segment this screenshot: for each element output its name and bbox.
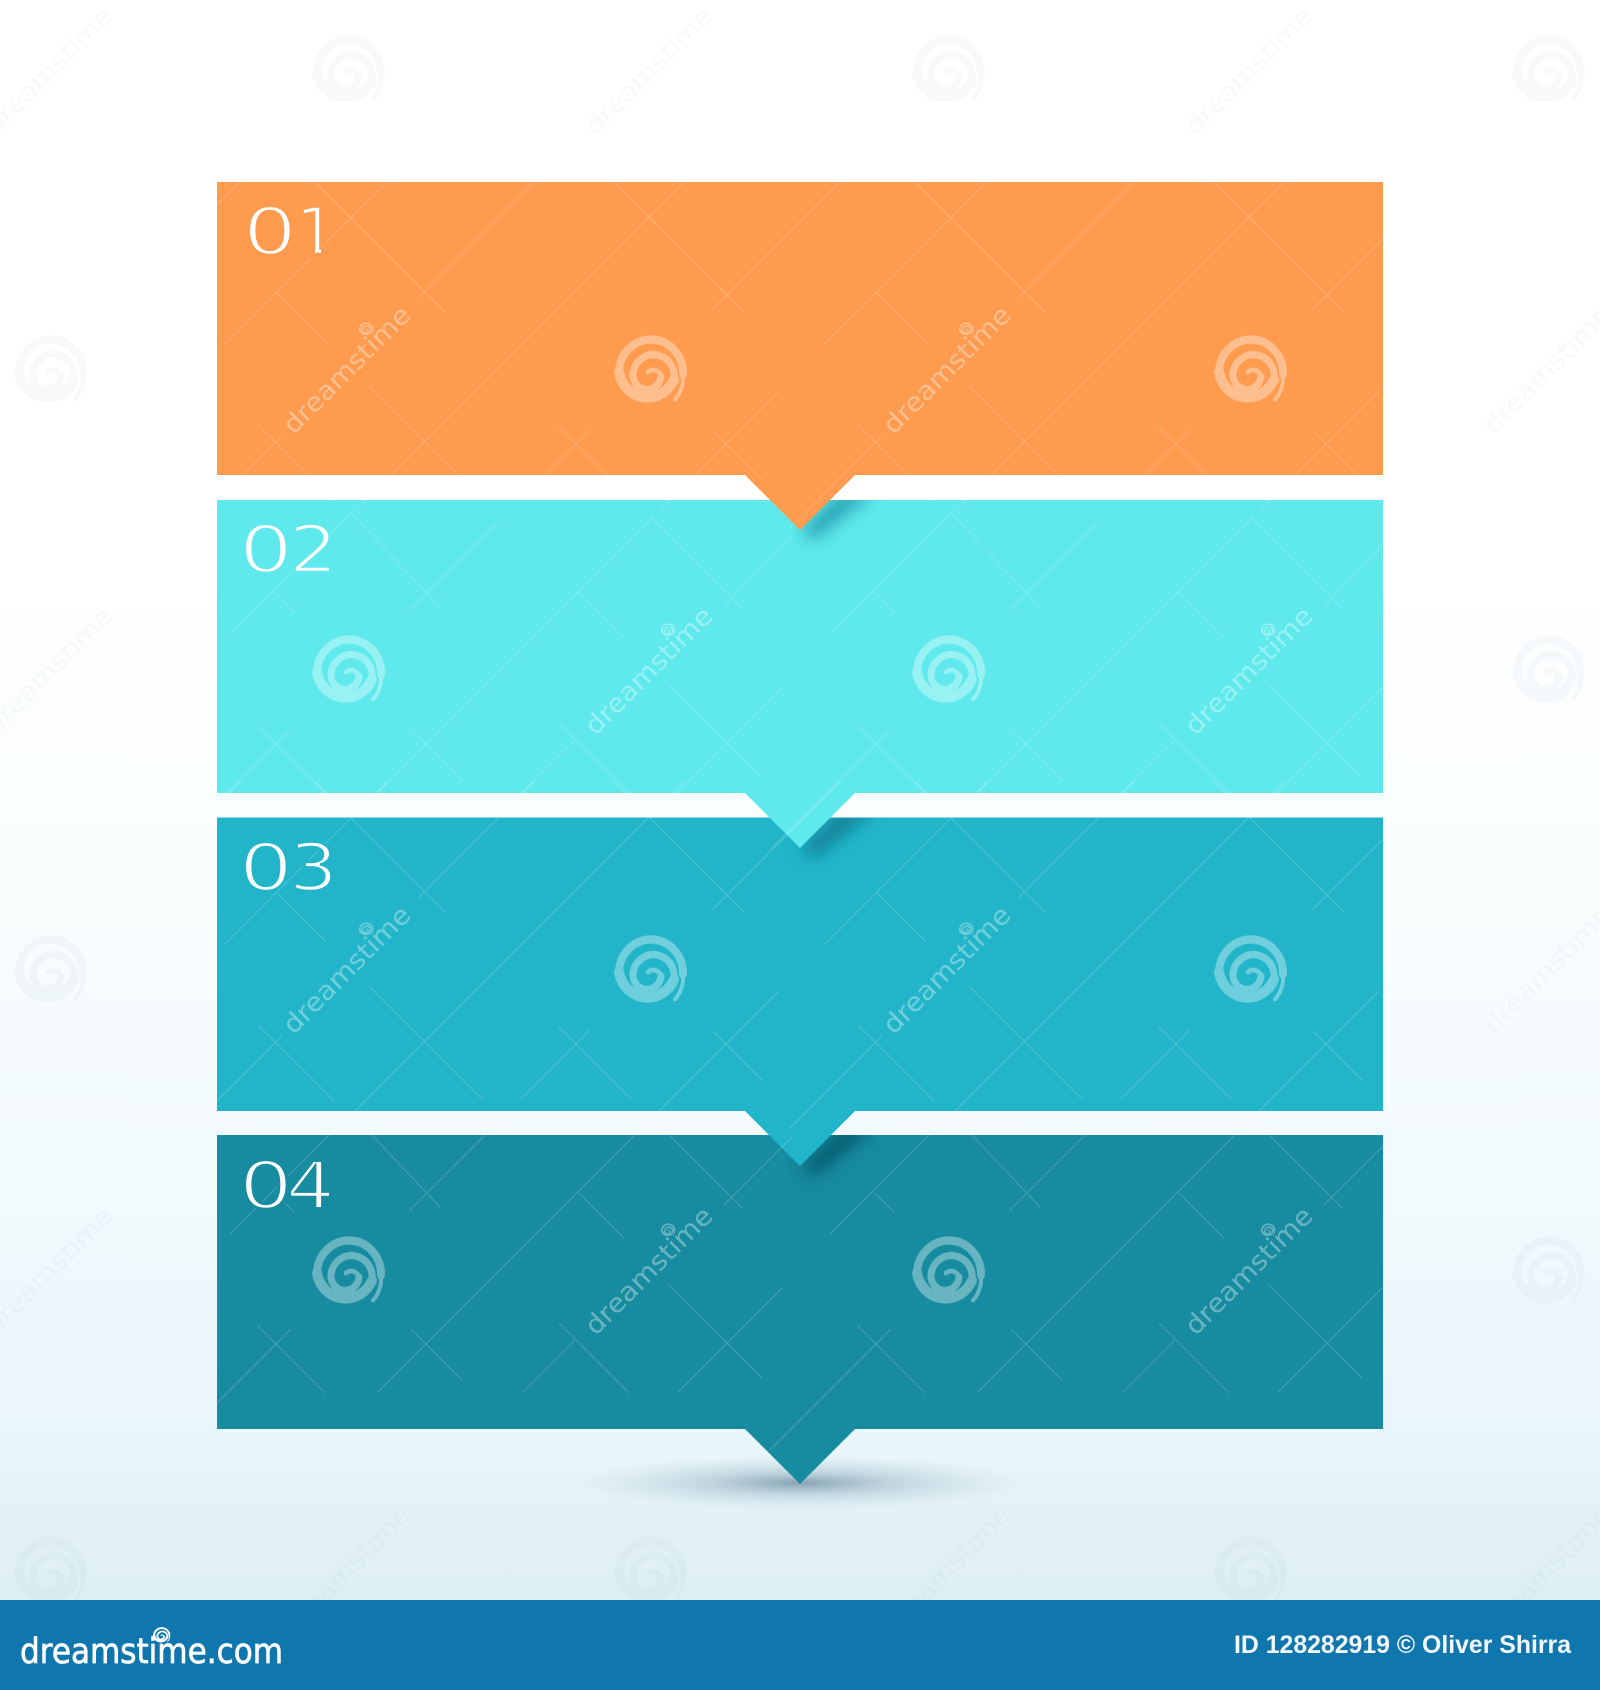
footer credit text: ID 128282919 © Oliver Shirra <box>1234 1631 1572 1659</box>
faint background watermarks: dreamstime <box>1179 1 1319 141</box>
faint background watermarks: dreamstime <box>277 1500 417 1640</box>
number 03 <box>238 831 337 906</box>
panel watermark text: dreamstime <box>1179 601 1319 741</box>
arrow shadow on panel 03 <box>800 810 875 858</box>
floor shadow under last arrow <box>575 1456 1025 1510</box>
panel 02 <box>217 492 1383 848</box>
faint background watermarks: dreamstime <box>579 1 719 141</box>
panel 04 <box>217 1128 1383 1484</box>
diagonal watermark lines over panels <box>217 182 1383 1450</box>
panel watermark text: dreamstime <box>277 900 417 1040</box>
number 04: 0 <box>238 1149 292 1224</box>
panel watermark spirals <box>317 340 1283 1300</box>
panel watermark text <box>277 300 1319 1341</box>
panel watermark text: dreamstime <box>877 900 1017 1040</box>
panel watermark text: dreamstime <box>579 601 719 741</box>
footer bar <box>0 1600 1600 1690</box>
number 01 <box>242 195 337 270</box>
number 04 <box>238 1149 334 1224</box>
number 01: 0 <box>242 195 296 270</box>
panel watermark text: dreamstime <box>877 300 1017 440</box>
panel watermark text: dreamstime <box>1179 1201 1319 1341</box>
footer logo text: dreamstime.com <box>20 1632 283 1672</box>
arrow shadow on panel 02 <box>800 492 875 540</box>
panel watermark text: dreamstime <box>579 1201 719 1341</box>
number 01: 1 <box>296 195 337 270</box>
arrow shadow on panel 04 <box>800 1128 875 1176</box>
number 04: 4 <box>286 1149 334 1224</box>
panel watermark text: dreamstime <box>277 300 417 440</box>
faint background watermarks: dreamstime <box>877 1500 1017 1640</box>
number 03: 3 <box>288 831 337 906</box>
icon: logo spiral <box>154 1628 169 1642</box>
panel 01 <box>217 182 1383 530</box>
panel 03 <box>217 810 1383 1166</box>
number 03: 0 <box>238 831 292 906</box>
number 02 <box>238 513 337 588</box>
number 02: 0 <box>238 513 292 588</box>
number 02: 2 <box>288 513 337 588</box>
